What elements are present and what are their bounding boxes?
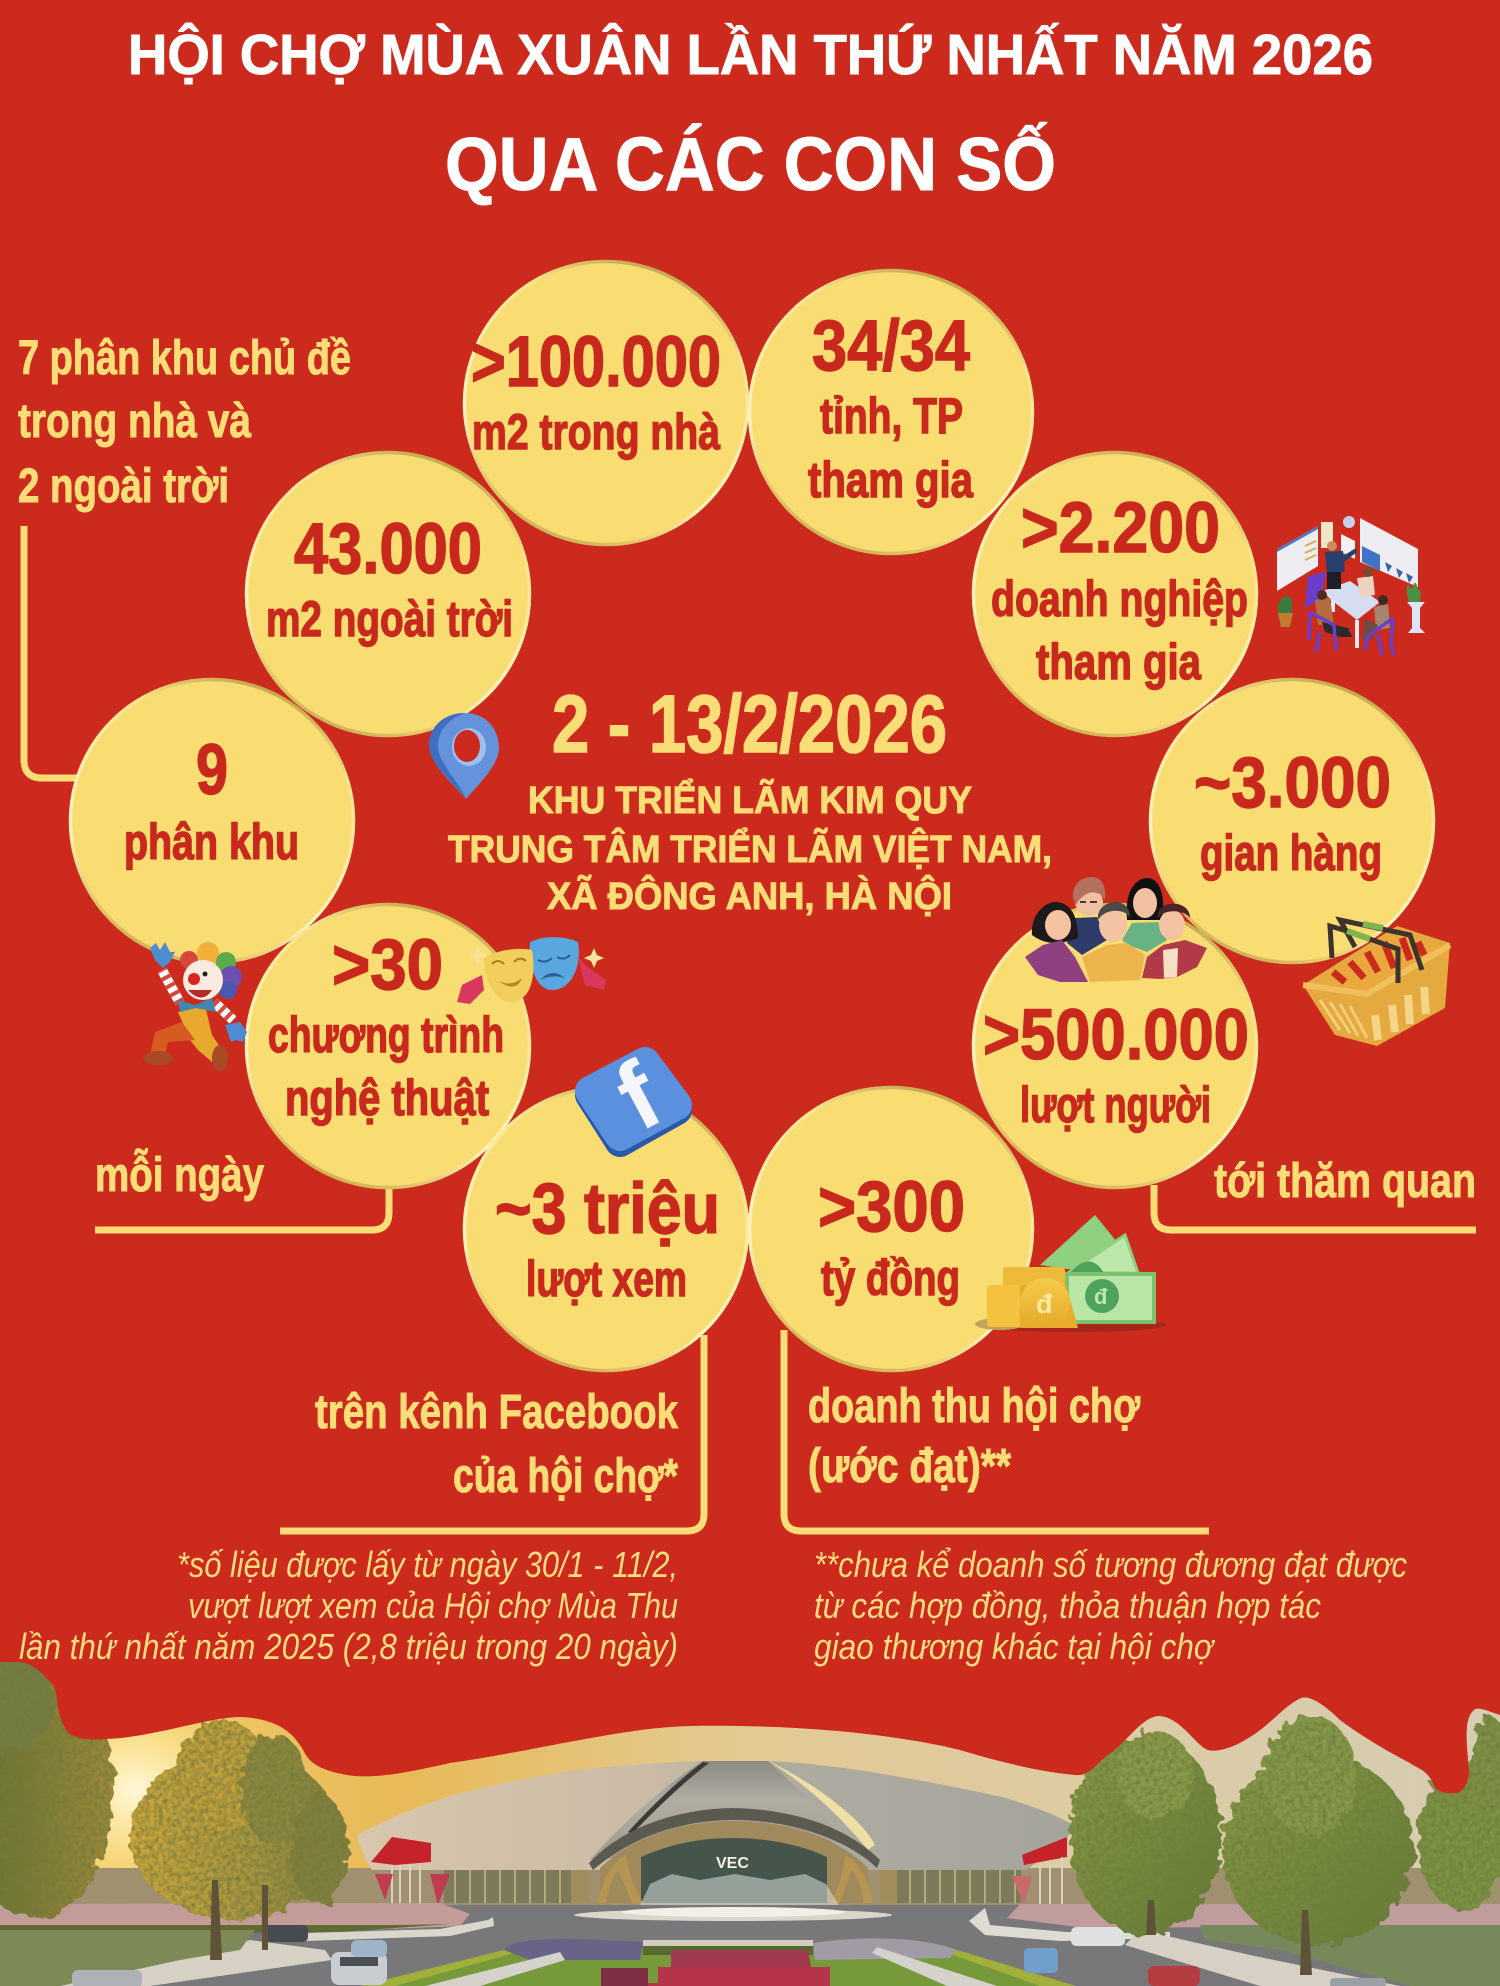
distant ground: [0, 1868, 1500, 1913]
basket front slats: [1375, 987, 1426, 1040]
left note: 7 phân khu: trong nhà và: [18, 395, 251, 448]
circle: 9 zones: [70, 680, 354, 962]
left sidewalk: [60, 1940, 332, 1986]
entrance glass: [641, 1838, 827, 1903]
roof centre petal: [590, 1761, 842, 1860]
circle: 300 billion dong: tỷ đồng: [821, 1250, 960, 1306]
small posters and clock: [1321, 522, 1333, 548]
title: HỘI CHỢ MÙA XUÂN LẦN THỨ NHẤT NĂM 2026: [128, 22, 1373, 87]
roof dark strip: [628, 1762, 709, 1834]
chairs: [1309, 612, 1336, 652]
circle: 2.200 businesses: doanh nghiệp: [991, 571, 1248, 627]
side label: trên kênh Facebook: của hội chợ*: [453, 1450, 678, 1503]
bow tie: [178, 998, 216, 1012]
right trees: [1069, 1715, 1500, 1945]
centre: date and venue: TRUNG TÂM TRIỂN LÃM VIỆT NAM,: [448, 826, 1052, 871]
circle: 2.200 businesses: [974, 452, 1256, 736]
side label: doanh thu: (ước đạt)**: [808, 1440, 1011, 1493]
seated person right: [1362, 595, 1390, 640]
connector: doanh thu: [784, 1330, 1209, 1531]
connector: mỗi ngày: [95, 1185, 389, 1230]
circle: 30 art programmes: [246, 904, 530, 1188]
circle: 300 billion dong: [750, 1088, 1032, 1370]
connector: Facebook: [280, 1335, 704, 1531]
presenter: [1325, 541, 1357, 589]
left note: 7 phân khu: 2 ngoài trời: [18, 460, 229, 513]
side label: doanh thu: [808, 1380, 1141, 1493]
centre: date and venue: [448, 679, 1052, 918]
head: [183, 960, 223, 1000]
side label: trên kênh Facebook: trên kênh Facebook: [315, 1386, 678, 1439]
subtitle: QUA CÁC CON SỐ: [445, 122, 1056, 206]
left board: [1277, 526, 1318, 591]
back chair: [1305, 572, 1326, 608]
icon: group of people: [1025, 877, 1207, 982]
person: man with glasses, back: [1067, 877, 1107, 955]
right tree trunks: [1146, 1900, 1312, 1975]
right flag: [1012, 1837, 1067, 1905]
connector: phân khu: [24, 526, 80, 778]
circle: 34/34 provinces: 34/34: [812, 307, 970, 386]
left kerb: [306, 1917, 494, 1941]
icon: meeting illustration: [1277, 516, 1425, 655]
centre: date and venue: XÃ ĐÔNG ANH, HÀ NỘI: [547, 873, 952, 918]
basket inner back wall: [1312, 933, 1443, 989]
icon: shopping basket: [1303, 920, 1450, 1046]
side label: doanh thu: doanh thu hội chợ: [808, 1380, 1141, 1433]
basket rim: [1303, 945, 1450, 994]
centre: date and venue: KHU TRIỂN LÃM KIM QUY: [528, 777, 972, 822]
left tree trunks: [210, 1880, 268, 1960]
circle: 3 million views: lượt xem: [526, 1251, 687, 1307]
icon: clown: [143, 942, 247, 1071]
circle: 100.000 m2 indoor: [464, 262, 748, 544]
left fence greenery: [0, 1930, 255, 1986]
garden white row: [643, 1941, 813, 1955]
arms: [162, 970, 180, 1003]
entrance panel: [600, 1821, 868, 1903]
right fence greenery: [1200, 1925, 1500, 1986]
person: centre man: [1082, 902, 1145, 982]
footnote left: lần thứ nhất năm 2025 (2,8 triệu trong 20 ngày): [19, 1626, 678, 1667]
handles: [1330, 926, 1398, 983]
icon: Facebook logo: f: [599, 1041, 679, 1151]
rainbow hair: [180, 951, 198, 969]
circle: 9 zones: phân khu: [124, 814, 299, 870]
left plant: [1278, 596, 1293, 627]
facade columns: [571, 1870, 897, 1903]
circle: 30 art programmes: chương trình: [268, 1007, 504, 1063]
circle: 34/34 provinces: [750, 270, 1032, 554]
right sidewalk: [1125, 1930, 1400, 1986]
circle: 100.000 m2 indoor: >100.000: [471, 323, 721, 402]
seated person left: [1315, 590, 1352, 637]
footnote left: vượt lượt xem của Hội chợ Mùa Thu: [188, 1585, 678, 1626]
footnote right: giao thương khác tại hội chợ: [814, 1626, 1216, 1667]
seated person top: [1357, 567, 1375, 597]
circle: 3.000 booths: ~3.000: [1194, 744, 1391, 823]
red wave over the photo: [0, 1640, 1500, 1793]
dome roof: [357, 1761, 1076, 1870]
garden lavender: [504, 1939, 643, 1960]
circle: 3 million views: ~3 triệu: [495, 1170, 720, 1249]
right plant and pedestal: [1407, 583, 1425, 633]
title: [128, 22, 1373, 206]
sun glow: [0, 1660, 285, 1920]
icon: money and coins: đ: [1094, 1284, 1108, 1309]
right kerb: [969, 1908, 1170, 1941]
road: [0, 1905, 1500, 1986]
circle: 3.000 booths: [1150, 680, 1434, 962]
circle: 500.000 visitors: lượt người: [1020, 1077, 1211, 1133]
VEC sign: VEC: [716, 1855, 749, 1872]
right board: [1360, 518, 1418, 587]
arch legs: [597, 1855, 873, 1903]
footnote right: **chưa kể doanh số tương đương đạt được: [814, 1544, 1407, 1585]
circle: 43.000 m2 outdoor: 43.000: [294, 510, 482, 589]
side label: mỗi ngày: mỗi ngày: [95, 1148, 264, 1202]
fountain basin: [574, 1909, 892, 1921]
footnote right: từ các hợp đồng, thỏa thuận hợp tác: [814, 1585, 1321, 1626]
footnote right: [814, 1544, 1407, 1667]
person: right man: [1142, 904, 1207, 979]
circle: 300 billion dong: >300: [818, 1168, 965, 1247]
left flags: [371, 1837, 450, 1905]
centre: date and venue: 2 - 13/2/2026: [552, 679, 947, 770]
circle: 500.000 visitors: [974, 904, 1256, 1188]
entrance arch band: [589, 1808, 880, 1870]
roof gold strip: [768, 1761, 875, 1850]
left flower bed: [0, 1903, 470, 1932]
circle: 43.000 m2 outdoor: m2 ngoài trời: [266, 591, 513, 647]
glass facade left: [444, 1870, 571, 1903]
footnote left: *số liệu được lấy từ ngày 30/1 - 11/2,: [177, 1544, 678, 1585]
person: woman left: [1025, 902, 1088, 982]
left trees: [0, 1650, 348, 1920]
circle: 2.200 businesses: tham gia: [1036, 634, 1202, 690]
basket body: [1303, 926, 1450, 1046]
cars: [72, 1925, 1386, 1986]
circle: 500.000 visitors: >500.000: [983, 996, 1249, 1075]
left note: 7 phân khu: [18, 332, 351, 513]
circle: 34/34 provinces: tham gia: [808, 452, 974, 508]
side label: trên kênh Facebook: [315, 1386, 678, 1503]
circle: 30 art programmes: >30: [332, 926, 443, 1005]
icon: money and coins: đ: [1036, 1289, 1053, 1319]
glass facade right: [897, 1870, 1021, 1903]
circle: 43.000 m2 outdoor: [246, 452, 530, 736]
connector: tới thăm quan: [1154, 1185, 1476, 1230]
icon: location pin: [429, 713, 499, 799]
circle: 2.200 businesses: >2.200: [1021, 489, 1220, 568]
garden red flowers: [671, 1950, 811, 1967]
left note: 7 phân khu: 7 phân khu chủ đề: [18, 332, 351, 385]
circle: 100.000 m2 indoor: m2 trong nhà: [472, 404, 720, 460]
landscape photo: exhibition centre: [0, 1650, 1500, 1986]
gloves: [150, 942, 175, 968]
fountain water: [638, 1874, 842, 1910]
circle: 30 art programmes: nghệ thuật: [285, 1070, 489, 1126]
sky: [0, 1650, 1500, 1920]
circle: 34/34 provinces: tỉnh, TP: [820, 388, 963, 444]
icon: money and coins: [975, 1215, 1167, 1332]
right flower bed: [1007, 1904, 1500, 1928]
circle: 3.000 booths: gian hàng: [1200, 825, 1382, 881]
central garden lawn: [360, 1950, 1076, 1986]
footnote left: [19, 1544, 678, 1667]
person: woman with long hair, back: [1122, 878, 1167, 952]
icon: theatre masks: [457, 937, 606, 1004]
circle: 3 million views: [464, 1088, 748, 1370]
table: [1323, 581, 1380, 620]
trousers and legs: [178, 1005, 222, 1062]
circle: 9 zones: 9: [196, 731, 228, 810]
